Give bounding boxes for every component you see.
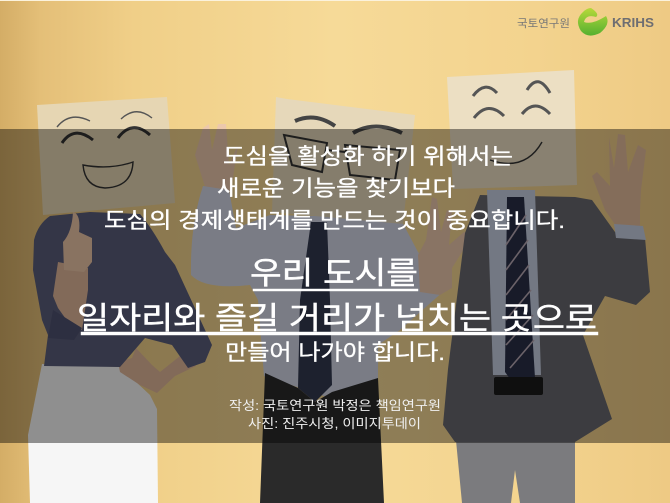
logo korean name: 국토연구원 [517,17,570,30]
icon: thumbs up hand [63,212,92,272]
middle man raised hand [195,124,238,195]
woman arm on hip [118,348,196,393]
credits: 작성: 국토연구원 박정은 책임연구원 [229,398,441,413]
icon: green leaf logo [578,8,608,36]
intro text block: 도심을 활성화 하기 위해서는 [223,144,513,169]
credits [229,398,441,431]
credits: 사진: 진주시청, 이미지투데이 [248,416,421,431]
intro text block [104,144,565,233]
logo latin name: KRIHS [612,15,654,30]
woman rolled sleeve [48,310,82,340]
logo: KRIHS [517,8,654,36]
middle man trousers [260,373,384,503]
right man raised hand [592,134,646,226]
middle man shirt [191,186,445,398]
box head: right smiling face [447,70,577,189]
middle man right hand [418,197,472,295]
emphasis heading [77,256,598,336]
person: right man in suit [443,134,650,503]
woman raised forearm [53,262,88,330]
woman skirt [28,364,158,503]
middle man tie [298,222,332,402]
right man trousers [455,430,575,503]
right man jacket [443,195,650,442]
person: woman with thumbs up [28,212,212,503]
right man shirt cuff [614,224,646,240]
box head: middle glasses face [272,97,415,224]
right man tie [505,197,535,390]
emphasis heading: 일자리와 즐길 거리가 넘치는 곳으로 [77,301,597,336]
right man shirt [487,190,541,375]
box head: left smiling face [37,97,175,215]
dark translucent text band [0,129,670,443]
right man belt [494,377,543,395]
right man tie stripes [506,215,534,368]
person: middle man [191,124,472,503]
intro text block: 도심의 경제생태계를 만드는 것이 중요합니다. [104,208,565,233]
woman shirt [33,212,212,368]
intro text block: 새로운 기능을 찾기보다 [217,176,455,201]
emphasis heading: 우리 도시를 [250,256,418,291]
closing line: 만들어 나가야 합니다. [225,340,445,365]
